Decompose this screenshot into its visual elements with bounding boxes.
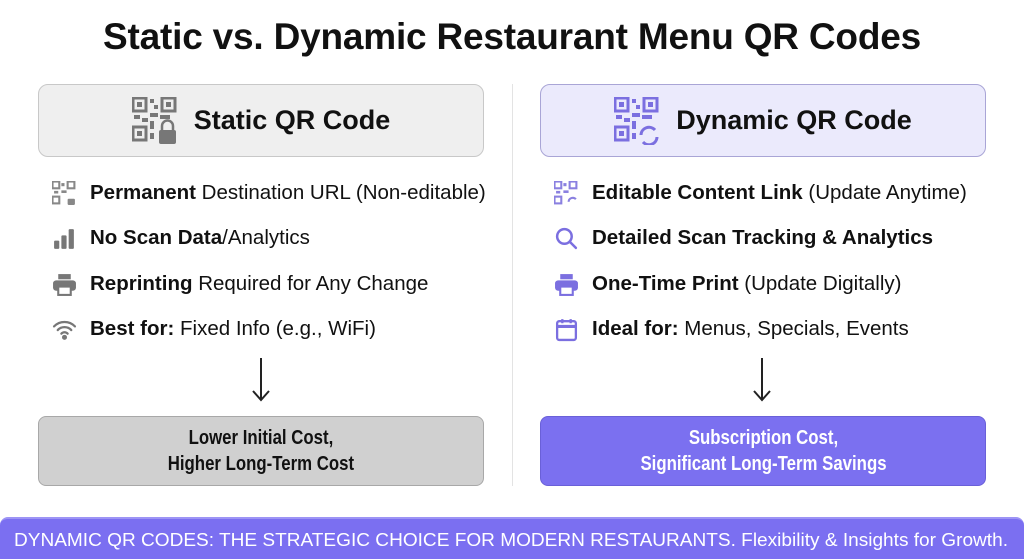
- static item 2: No Scan Data/Analytics: [90, 226, 310, 249]
- panel header: static: [38, 84, 484, 157]
- dynamic item 4: Ideal for: Menus, Specials, Events: [592, 317, 909, 340]
- dynamic item 3: One-Time Print (Update Digitally): [592, 272, 902, 295]
- footer banner: [0, 517, 1024, 559]
- panel header: static: Static QR Code: [194, 105, 390, 135]
- static item 1: Permanent Destination URL (Non-editable): [90, 181, 486, 204]
- title: Static vs. Dynamic Restaurant Menu QR Codes: [103, 16, 921, 57]
- icon: qr refresh: [614, 97, 658, 145]
- arrow: dynamic: [753, 358, 771, 402]
- divider: [512, 84, 513, 486]
- arrow: static: [252, 358, 270, 402]
- cost box: static: Higher Long-Term Cost: [168, 453, 354, 475]
- static item 3: Reprinting Required for Any Change: [90, 272, 428, 295]
- cost box: dynamic: Subscription Cost,: [688, 427, 838, 449]
- panel header: dynamic: [540, 84, 986, 157]
- icon: qr lock: [132, 97, 176, 144]
- cost box: dynamic: [540, 416, 986, 486]
- cost box: static: Lower Initial Cost,: [189, 427, 333, 449]
- cost box: dynamic: Significant Long-Term Savings: [640, 453, 886, 475]
- static item 4: Best for: Fixed Info (e.g., WiFi): [90, 317, 376, 340]
- dynamic item 2: Detailed Scan Tracking & Analytics: [592, 226, 933, 249]
- dynamic item 1: Editable Content Link (Update Anytime): [592, 181, 967, 204]
- footer banner: DYNAMIC QR CODES: THE STRATEGIC CHOICE FOR MODERN RESTAURANTS. Flexibility & Insights for Growth.: [14, 530, 1008, 550]
- cost box: static: [38, 416, 484, 486]
- panel header: dynamic: Dynamic QR Code: [676, 105, 912, 135]
